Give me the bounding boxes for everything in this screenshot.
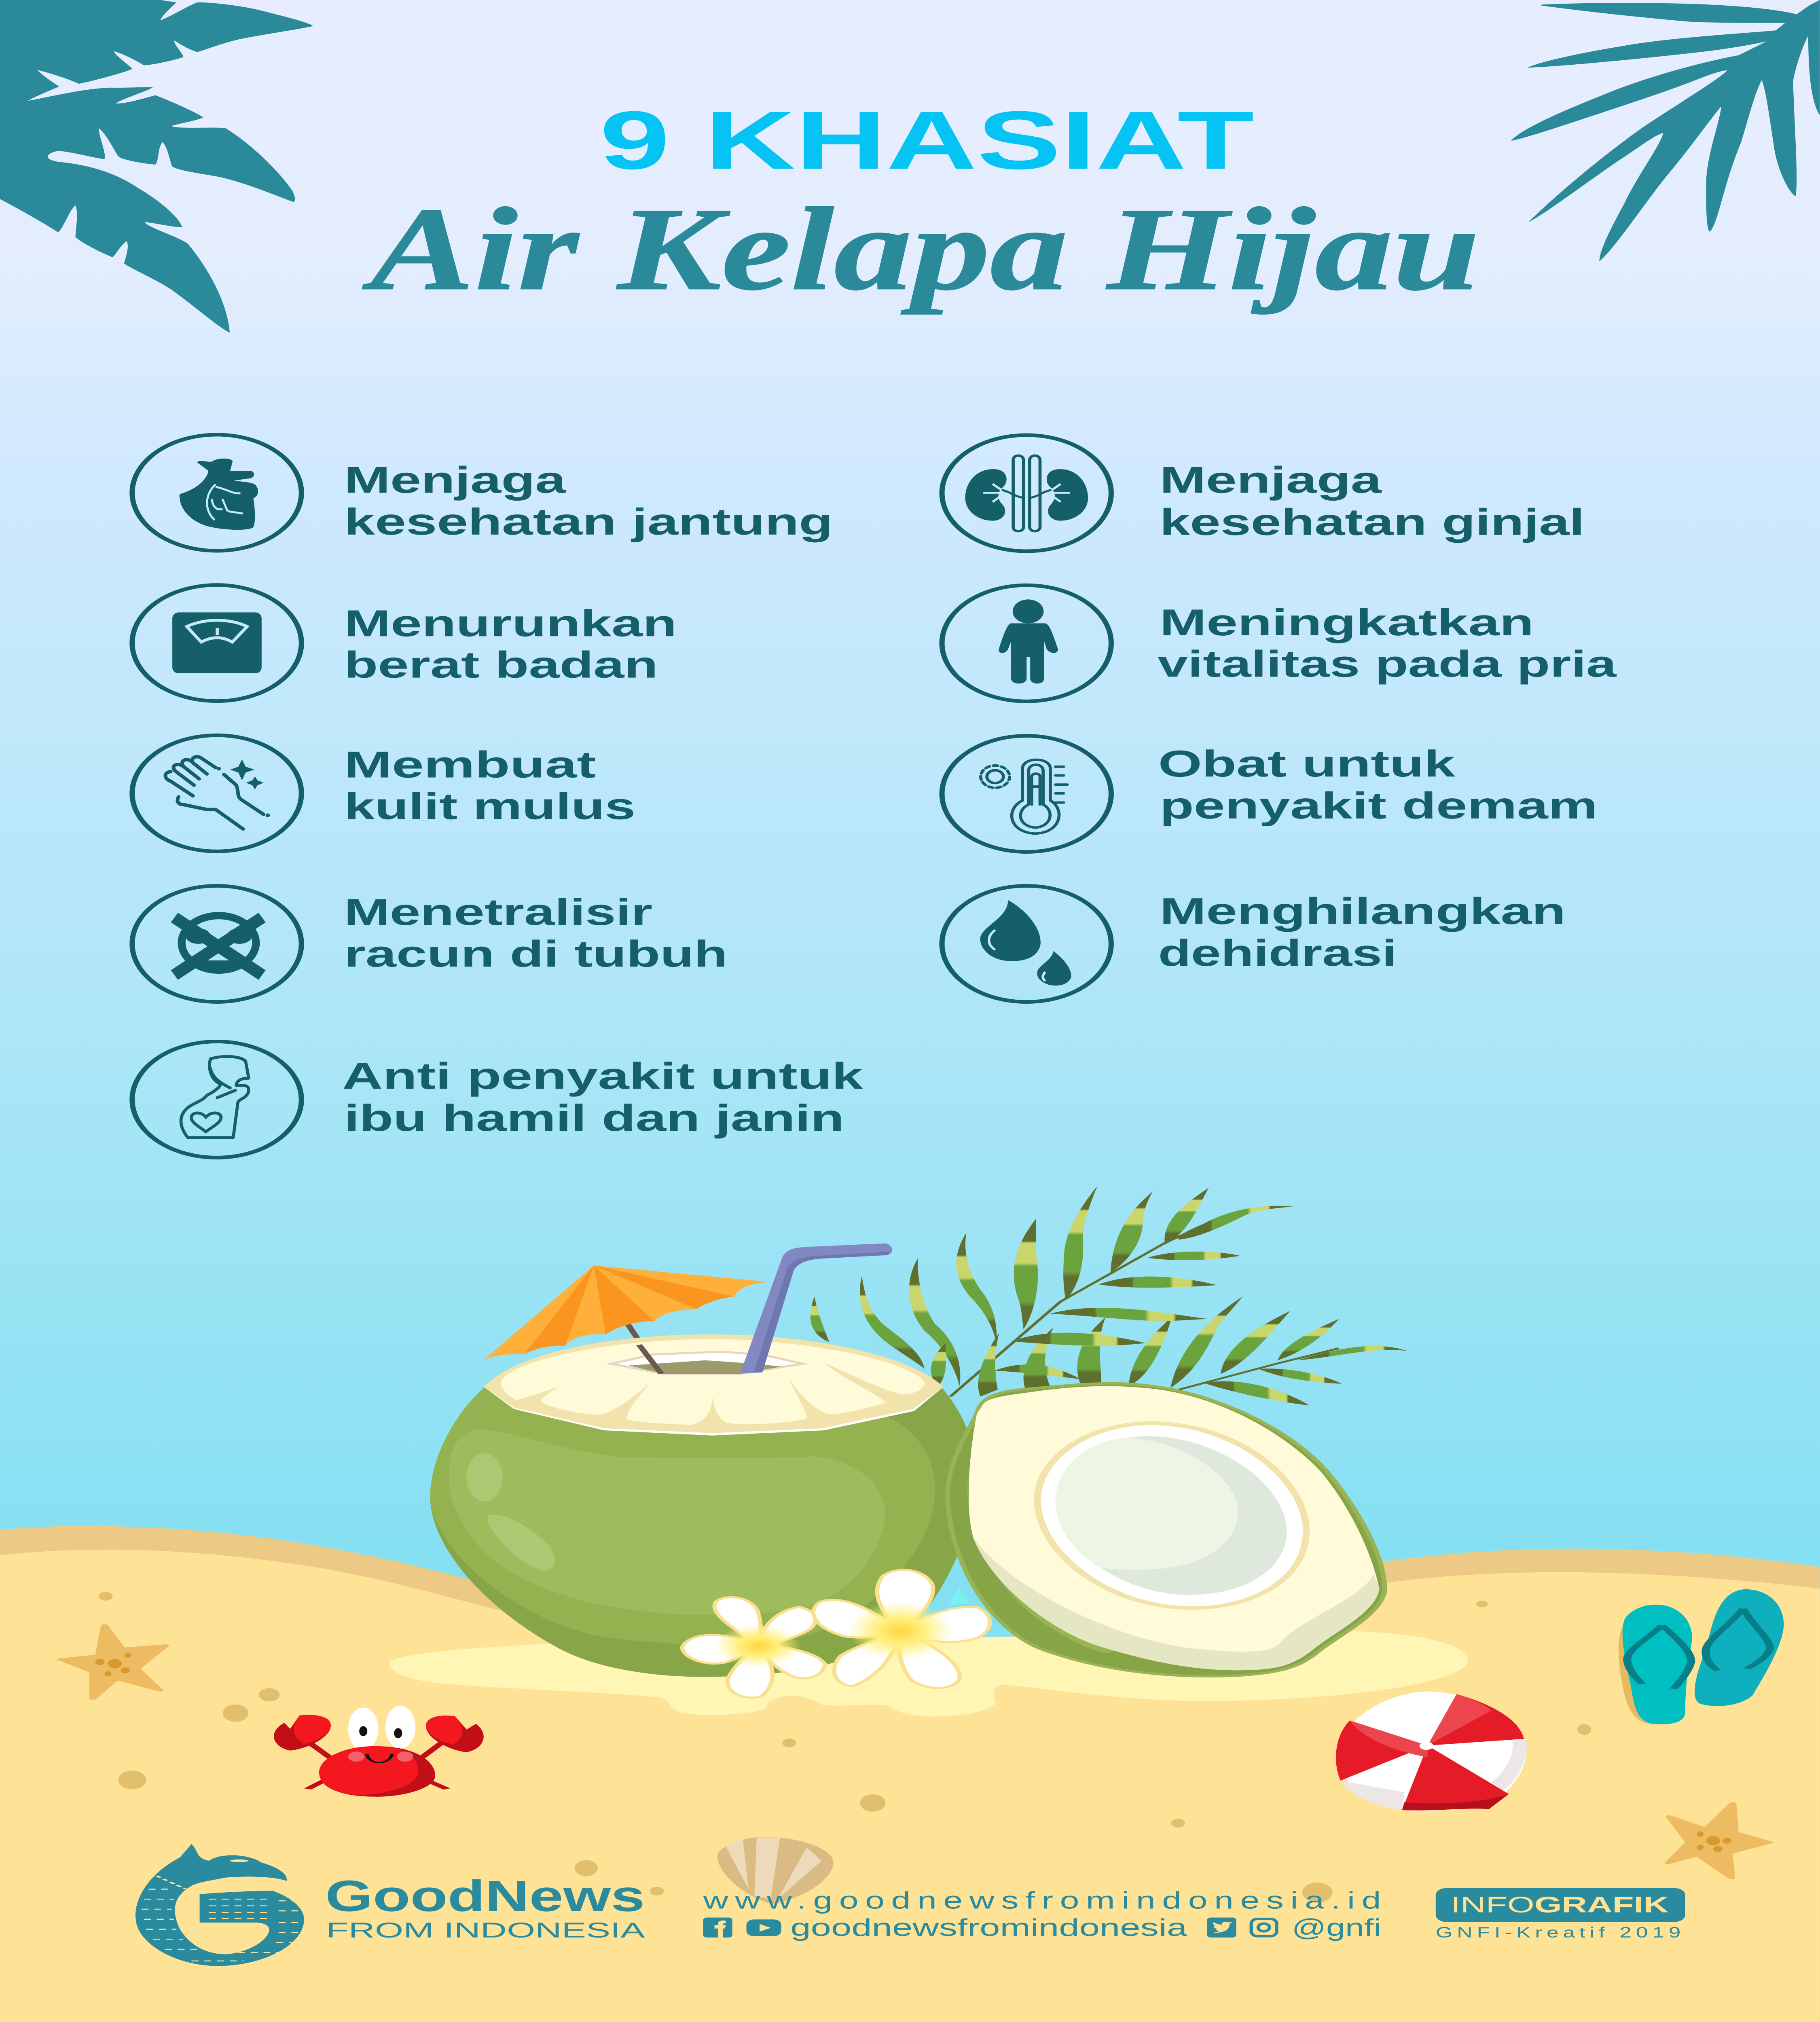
contact and social text xyxy=(703,1887,1381,1942)
benefit: dehidrasi xyxy=(942,886,1566,1002)
cocktail umbrella xyxy=(484,1265,769,1374)
icon: pregnant woman xyxy=(181,1056,249,1138)
illustration: beach items xyxy=(60,1589,1784,1904)
palm frond behind coconut xyxy=(811,1186,1407,1406)
half coconut xyxy=(948,1383,1384,1676)
text: Menurunkan xyxy=(344,603,677,644)
benefit: berat badan: berat badan xyxy=(344,644,658,686)
badge label: INFO GRAFIK xyxy=(1451,1892,1669,1917)
icon: scale xyxy=(172,612,262,673)
benefit: demam: penyakit demam xyxy=(1160,785,1598,827)
logo emblem xyxy=(135,1844,304,1966)
icon: kidneys xyxy=(965,456,1088,531)
icon: heart xyxy=(180,459,258,530)
benefit: jantung xyxy=(132,435,833,551)
icon: palm leaf top right xyxy=(1511,0,1820,261)
text: Menjaga xyxy=(1160,459,1382,501)
starfish left xyxy=(60,1625,166,1699)
benefit: ibu hamil: ibu hamil dan janin xyxy=(344,1097,844,1139)
benefit: kulit xyxy=(132,735,635,851)
icon: water drops xyxy=(980,900,1071,986)
benefit: vitalitas xyxy=(942,585,1617,701)
title line 2: Air Kelapa Hijau xyxy=(361,184,1480,315)
benefit: berat badan xyxy=(132,585,677,701)
benefit: vitalitas: vitalitas pada pria xyxy=(1158,643,1617,685)
text: Menetralisir xyxy=(344,891,652,933)
text: Obat untuk xyxy=(1158,743,1456,785)
icon: crossed skull xyxy=(174,916,262,975)
instagram handle: @gnfi xyxy=(1292,1914,1381,1942)
logo text: GoodNews xyxy=(325,1871,645,1920)
seashell xyxy=(717,1837,833,1904)
panel: left benefits column xyxy=(132,435,863,1158)
website: www.goodnewsfromindonesia.id xyxy=(703,1887,1381,1914)
back sand dune xyxy=(0,1526,1820,2022)
logo: GoodNews from Indonesia: FROM INDONESIA xyxy=(326,1918,645,1942)
beach ball xyxy=(1336,1692,1527,1811)
icon: thermometer and sun xyxy=(981,760,1067,833)
icon: twitter xyxy=(1207,1918,1236,1937)
logo: GoodNews from Indonesia xyxy=(135,1844,645,1966)
panel: right benefits column xyxy=(942,435,1617,1002)
benefit: ginjal xyxy=(942,435,1585,551)
illustration: coconuts xyxy=(430,1186,1407,1698)
starfish right xyxy=(1668,1803,1770,1878)
straw xyxy=(740,1243,892,1374)
crab xyxy=(274,1706,484,1797)
benefit: racun xyxy=(132,886,728,1002)
benefit: kulit: kulit mulus xyxy=(344,785,635,827)
icon: youtube xyxy=(747,1919,781,1936)
benefit: ibu hamil xyxy=(132,1041,863,1158)
icon: hand with sparkles xyxy=(165,757,270,829)
sand specks xyxy=(99,1592,1591,1903)
title line 1: 9 KHASIAT xyxy=(600,94,1254,186)
facebook handle: goodnewsfromindonesia xyxy=(790,1914,1187,1942)
badge: infografik xyxy=(1436,1888,1685,1941)
flip flops xyxy=(1619,1589,1784,1724)
badge credit: GNFI-Kreatif 2019 xyxy=(1436,1924,1681,1941)
icon: facebook xyxy=(703,1918,732,1937)
benefit: dehidrasi: dehidrasi xyxy=(1158,932,1397,974)
text: Menghilangkan xyxy=(1160,890,1566,932)
whole coconut xyxy=(430,1335,977,1677)
text: Membuat xyxy=(344,744,596,785)
front sand xyxy=(0,1550,1820,2022)
title xyxy=(361,94,1480,315)
icon: instagram xyxy=(1251,1919,1277,1936)
benefit: demam xyxy=(942,736,1598,852)
icon: man xyxy=(999,599,1058,683)
benefit: ginjal: kesehatan ginjal xyxy=(1160,501,1585,543)
text: Anti penyakit untuk xyxy=(342,1055,863,1097)
benefit: racun: racun di tubuh xyxy=(344,933,728,975)
text: Menjaga xyxy=(344,459,567,501)
coconut shadow on sand xyxy=(389,1631,1468,1717)
gap between coconuts xyxy=(949,1587,970,1605)
benefit: jantung: kesehatan jantung xyxy=(344,501,833,543)
text: Meningkatkan xyxy=(1160,602,1534,643)
icon: palm leaf top left xyxy=(0,0,313,332)
flowers xyxy=(682,1570,990,1698)
